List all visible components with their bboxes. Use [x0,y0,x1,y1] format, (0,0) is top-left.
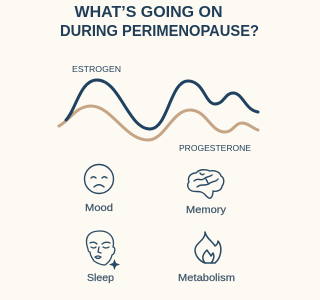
curve: progesterone [59,106,258,140]
icon: sleep face with sparkle [86,231,120,270]
icon: sparkle [109,259,120,270]
title [60,4,259,40]
title: DURING PERIMENOPAUSE? [60,23,259,40]
label: memory: Memory [186,204,227,216]
icon: memory brain [188,170,224,198]
label: sleep: Sleep [87,272,114,284]
label: estrogen: ESTROGEN [72,64,121,74]
curve: estrogen [66,80,258,129]
icon: mood face [84,164,114,194]
label: progesterone: PROGESTERONE [179,143,251,153]
icon: metabolism flame [195,232,221,263]
line chart: hormone curves [59,80,258,140]
label: mood: Mood [85,202,113,214]
label: metabolism: Metabolism [178,272,235,284]
title: WHAT’S GOING ON [74,4,222,21]
